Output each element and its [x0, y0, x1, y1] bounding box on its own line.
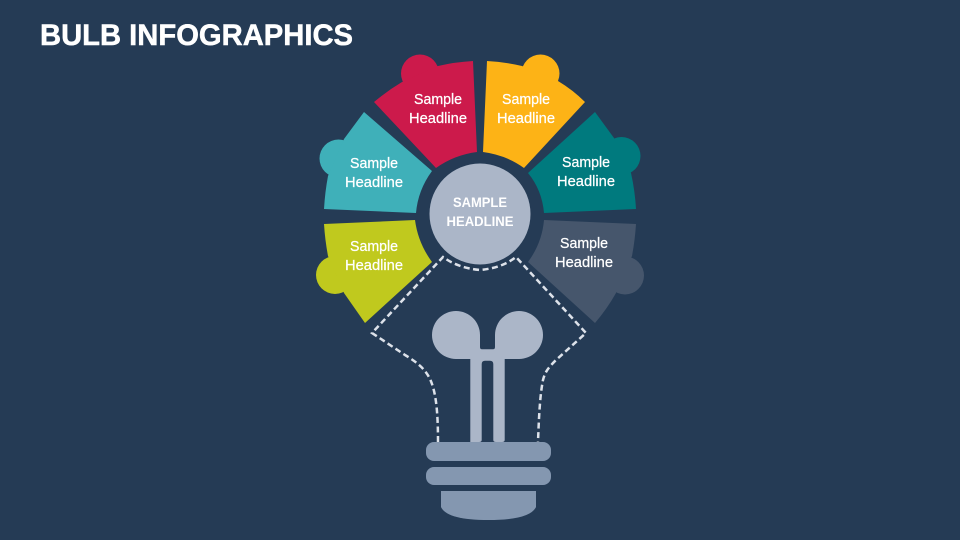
- dashed bulb outline: [372, 257, 586, 442]
- panel: slate petal: Sample: [560, 236, 608, 252]
- panel: lime petal: Headline: [345, 258, 403, 274]
- center circle headline: [430, 164, 530, 264]
- panel: yellow petal: [483, 54, 585, 168]
- panel: slate petal: Headline: [555, 255, 613, 271]
- panel: slate petal: [528, 220, 644, 323]
- panel: dark teal petal: Headline: [557, 174, 615, 190]
- panel: red petal: Headline: [409, 111, 467, 127]
- panel: dark teal petal: Sample: [562, 155, 610, 171]
- panel: dark teal petal: [528, 112, 640, 213]
- icon: bulb filament: [432, 311, 543, 442]
- center circle headline: SAMPLE: [453, 194, 507, 210]
- panel: teal petal: Headline: [345, 175, 403, 191]
- panel: yellow petal: Headline: [497, 111, 555, 127]
- panel: red petal: [374, 54, 477, 168]
- center circle headline: HEADLINE: [446, 213, 514, 229]
- panel: lime petal: [316, 220, 432, 323]
- icon: bulb base: [426, 442, 551, 520]
- panel: teal petal: [320, 112, 432, 213]
- panel: teal petal: Sample: [350, 156, 398, 172]
- infographic: bulb petals: [316, 54, 644, 323]
- panel: yellow petal: Sample: [502, 92, 550, 108]
- panel: lime petal: Sample: [350, 239, 398, 255]
- panel: red petal: Sample: [414, 92, 462, 108]
- title: BULB INFOGRAPHICS: [40, 19, 353, 52]
